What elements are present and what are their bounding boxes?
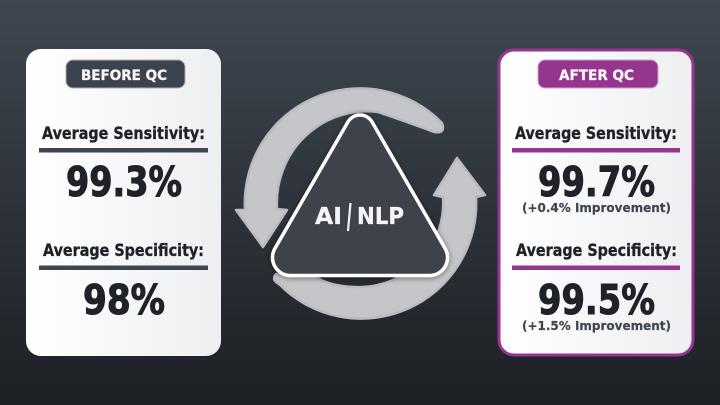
badge: before QC: BEFORE QC	[81, 68, 167, 84]
badge: after QC	[538, 60, 658, 88]
value: 98%: 98%	[83, 276, 165, 324]
label: AI/NLP: AI	[315, 204, 342, 230]
label: AI/NLP: NLP	[357, 204, 404, 230]
heading: average specificity after: Average Specificity:	[516, 241, 677, 260]
note: +0.4% improvement: (+0.4% Improvement)	[522, 200, 671, 215]
note: +1.5% improvement: (+1.5% Improvement)	[522, 318, 671, 333]
panel: after QC	[499, 50, 693, 355]
badge: after QC: AFTER QC	[559, 68, 634, 84]
value: 99.7%: 99.7%	[538, 158, 655, 206]
label: AI/NLP	[315, 203, 404, 231]
heading: average specificity before: Average Specificity:	[43, 241, 204, 260]
badge: before QC	[66, 60, 185, 88]
value: 99.3%: 99.3%	[66, 158, 182, 206]
panel: before QC	[26, 49, 221, 356]
heading: average sensitivity before: Average Sensitivity:	[42, 124, 205, 143]
heading: average sensitivity after: Average Sensitivity:	[515, 124, 677, 143]
arrow: upper-left cycle arrow	[236, 88, 443, 247]
value: 99.5%: 99.5%	[538, 276, 655, 324]
arrow: lower-right cycle arrow	[274, 158, 485, 319]
central triangle: AI/NLP	[272, 115, 448, 276]
